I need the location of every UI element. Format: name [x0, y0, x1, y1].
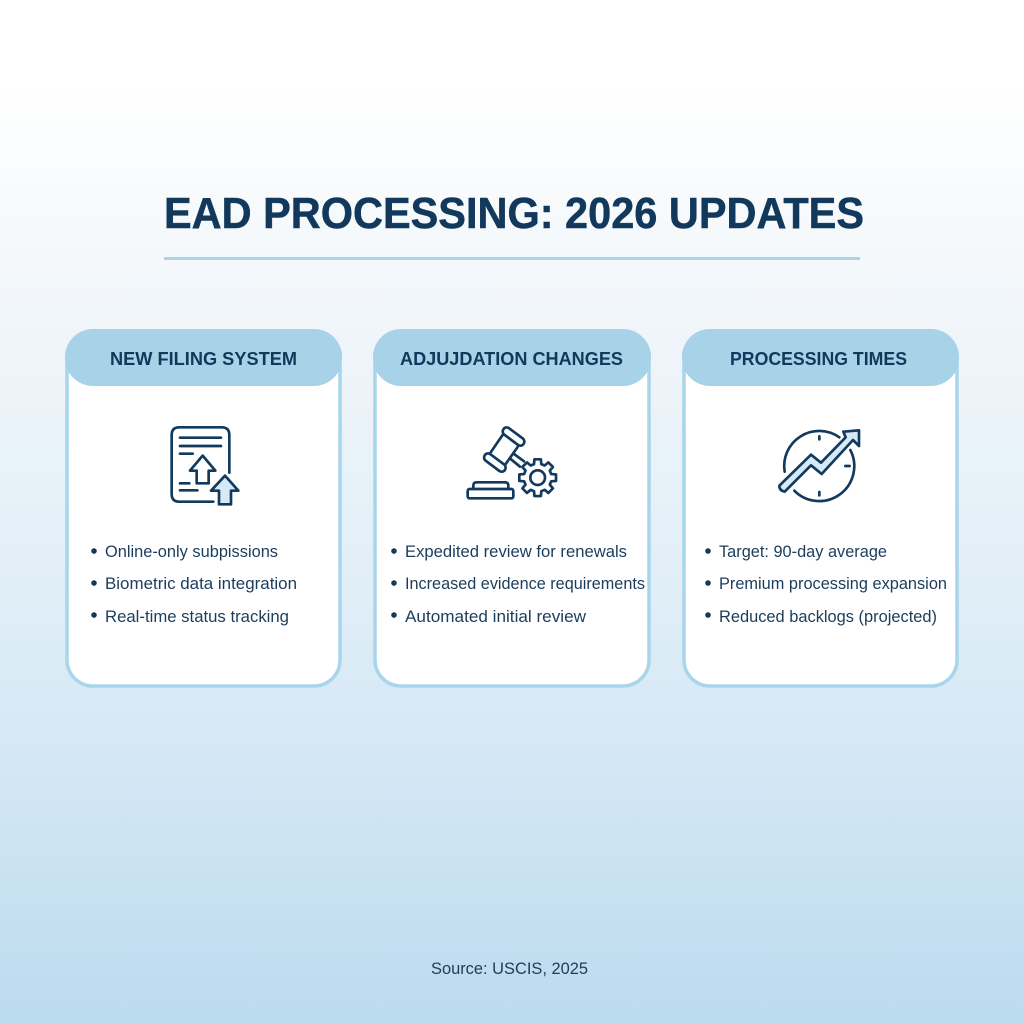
icon: document upload — [172, 427, 238, 504]
bullet list: Real-time status tracking — [105, 608, 289, 626]
bullet list: Online-only subpissions — [105, 543, 278, 561]
bullet list: Increased evidence requirements — [405, 575, 645, 593]
card header — [65, 329, 342, 386]
icon: clock with rising arrow — [779, 430, 859, 501]
bullet list: Premium processing expansion — [719, 575, 947, 593]
panel: adjudication changes — [373, 329, 651, 686]
bullet list — [705, 543, 947, 626]
source note: Source: USCIS, 2025 — [431, 960, 588, 978]
card header — [682, 329, 959, 386]
bullet list: Biometric data integration — [105, 575, 297, 593]
bullet list: Reduced backlogs (projected) — [719, 608, 937, 626]
card body — [375, 331, 649, 686]
panel: processing times — [682, 329, 959, 686]
bullet list: Automated initial review — [405, 608, 586, 626]
title underline — [164, 257, 860, 260]
card body — [67, 331, 340, 686]
bullet list: Expedited review for renewals — [405, 543, 627, 561]
bullet list: Target: 90-day average — [719, 543, 887, 561]
heading: ADJUJDATION CHANGES — [400, 348, 623, 369]
title: EAD PROCESSING: 2026 UPDATES — [164, 189, 864, 238]
card header — [373, 329, 651, 386]
panel: new filing system — [65, 329, 342, 686]
heading: PROCESSING TIMES — [730, 348, 907, 369]
bullet list — [91, 543, 297, 626]
card body — [684, 331, 957, 686]
bullet list — [391, 543, 645, 626]
icon: gavel and gear — [468, 426, 556, 498]
heading: NEW FILING SYSTEM — [110, 348, 297, 369]
